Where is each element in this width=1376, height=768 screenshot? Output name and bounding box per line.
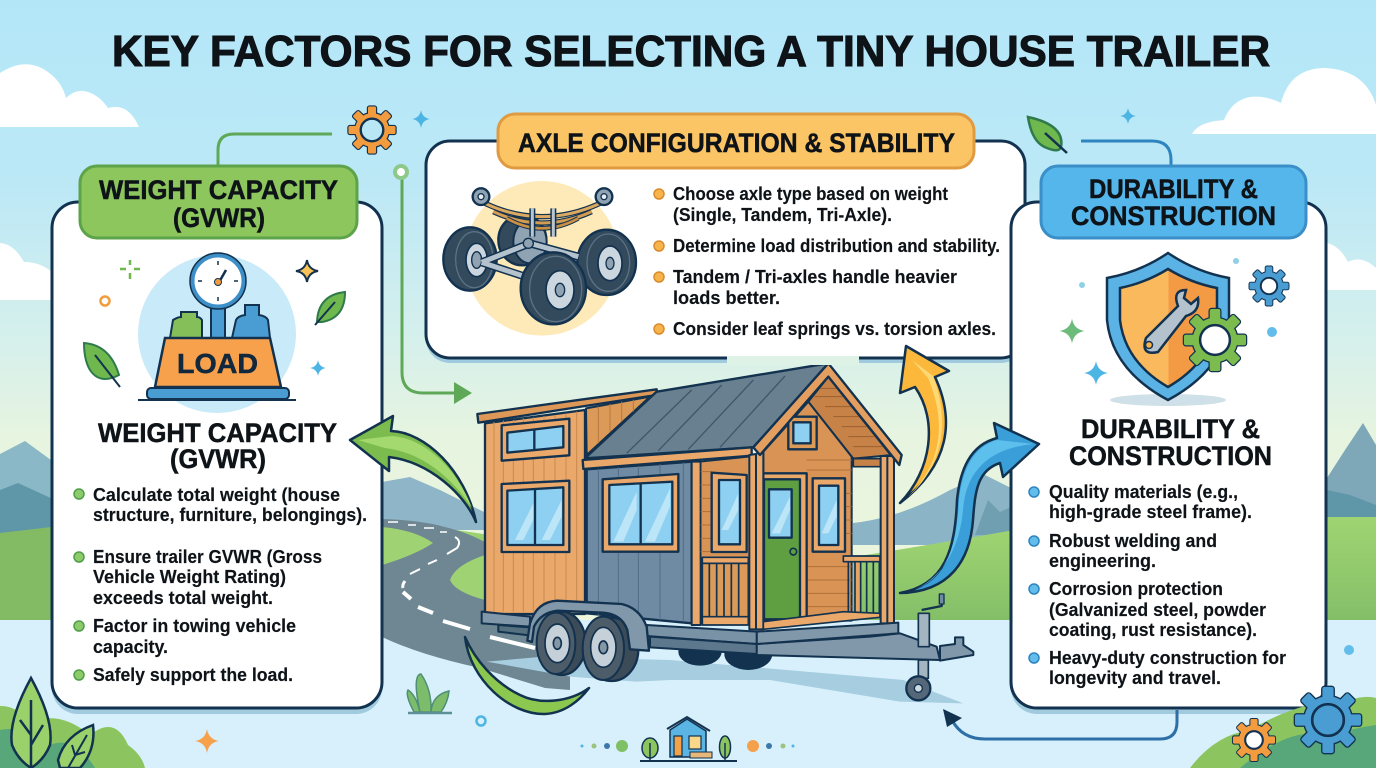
badge: axle: AXLE CONFIGURATION & STABILITY xyxy=(518,128,955,158)
connector: durability xyxy=(1081,141,1171,166)
icon: orange gear xyxy=(348,106,396,154)
bullet: corrosion xyxy=(1029,579,1266,640)
panel: weight capacity xyxy=(52,166,382,714)
icon: orange gear bottom xyxy=(1233,719,1275,761)
badge: weight capacity xyxy=(80,166,357,238)
bullet: calculate total weight: Calculate total weight (house xyxy=(93,485,340,505)
bullet: choose axle: Choose axle type based on weight xyxy=(673,184,948,204)
hills: bottom left inner xyxy=(0,729,95,768)
mountains centre left xyxy=(382,477,490,530)
icon: load scale xyxy=(138,253,296,413)
fender xyxy=(527,601,649,651)
roof xyxy=(585,363,828,458)
bullet: towing vehicle xyxy=(74,616,296,657)
mountains centre right xyxy=(853,475,1015,545)
cloud: top right xyxy=(1192,68,1376,134)
arrow: green to weight panel xyxy=(350,416,476,522)
bullet: robust welding: engineering. xyxy=(1049,551,1156,571)
ground: centre meadow xyxy=(382,519,490,625)
panel shadow xyxy=(426,146,1025,363)
hills: bottom left xyxy=(0,706,145,768)
bullet: calculate total weight xyxy=(74,485,367,525)
bullet: ensure GVWR xyxy=(74,547,322,608)
bullet: load distribution: Determine load distribution and stability. xyxy=(673,236,1000,256)
ground: far right meadow xyxy=(1327,517,1376,620)
road verge left xyxy=(382,527,433,565)
icon: blue ring xyxy=(476,716,486,726)
porch posts xyxy=(749,450,763,629)
blue wall xyxy=(587,462,692,623)
bullet: corrosion: coating, rust resistance). xyxy=(1049,620,1257,640)
panel shadow xyxy=(1011,208,1326,714)
bullet: heavy duty: longevity and travel. xyxy=(1049,668,1221,688)
badge: durability: CONSTRUCTION xyxy=(1071,201,1276,231)
icon: small leaf xyxy=(58,725,93,768)
heading: weight capacity: (GVWR) xyxy=(170,444,266,474)
cloud: top left xyxy=(0,64,139,127)
mountains left front xyxy=(0,483,55,540)
icon: sparkle blue small xyxy=(310,360,326,376)
bullet: ensure GVWR: Ensure trailer GVWR (Gross xyxy=(93,547,322,567)
heading: weight capacity: WEIGHT CAPACITY xyxy=(98,418,337,448)
under spheres xyxy=(678,638,722,666)
footer dots right xyxy=(747,740,794,752)
ground: foreground xyxy=(0,620,1376,768)
heading: durability: DURABILITY & xyxy=(1081,414,1260,444)
bullet: ensure GVWR: exceeds total weight. xyxy=(93,588,273,608)
bullet: towing vehicle: capacity. xyxy=(93,637,168,657)
hills: bottom right inner xyxy=(1240,725,1376,768)
icon: grass xyxy=(407,674,452,713)
connector: weight badge to gear xyxy=(218,134,332,166)
bullet: towing vehicle: Factor in towing vehicle xyxy=(93,616,296,636)
left railing xyxy=(702,563,748,618)
icon: shield xyxy=(1107,253,1229,406)
icon: axle xyxy=(443,181,636,336)
badge: durability: DURABILITY & xyxy=(1089,174,1258,204)
bullet: quality materials: high-grade steel frame). xyxy=(1049,502,1252,522)
tiny house on trailer xyxy=(477,363,973,703)
title: KEY FACTORS FOR SELECTING A TINY HOUSE TRAILER xyxy=(112,27,1270,76)
icon: ring xyxy=(100,296,110,306)
road dashes xyxy=(388,522,535,648)
icon: blue dot right xyxy=(1344,645,1354,655)
bullet: robust welding xyxy=(1029,531,1217,571)
wheels xyxy=(538,612,586,675)
icon: dot xyxy=(1233,258,1239,264)
bullet: tandem xyxy=(654,267,957,308)
deck xyxy=(757,623,898,644)
panel: axle configuration xyxy=(426,114,1025,365)
gable trim xyxy=(753,363,902,465)
bullet: tandem: loads better. xyxy=(673,288,780,308)
door xyxy=(763,473,807,621)
icon: leaf right xyxy=(315,292,345,325)
panel card xyxy=(426,141,1025,358)
icon: green gear xyxy=(1184,309,1246,371)
soffit xyxy=(808,377,891,459)
gable window xyxy=(788,417,817,449)
icon: dot xyxy=(1267,327,1277,337)
badge: durability xyxy=(1041,166,1306,238)
panel card xyxy=(52,202,382,708)
bullet: choose axle: (Single, Tandem, Tri-Axle). xyxy=(673,205,892,225)
bullet: tandem: Tandem / Tri-axles handle heavier xyxy=(673,267,957,287)
bullet: corrosion: (Galvanized steel, powder xyxy=(1049,600,1266,620)
arrow: connector head xyxy=(454,382,472,404)
bullet: robust welding: Robust welding and xyxy=(1049,531,1217,551)
gable wall xyxy=(763,402,852,621)
icon: load scale: LOAD xyxy=(177,348,258,379)
icon: blue gear bottom right xyxy=(1295,687,1361,753)
bullet: quality materials: Quality materials (e.g., xyxy=(1049,482,1238,502)
icon: sparkle blue xyxy=(1084,361,1108,385)
panel shadow xyxy=(52,208,382,714)
icon: sparkle green xyxy=(1060,318,1084,344)
bullet: quality materials xyxy=(1029,482,1252,522)
badge: weight capacity: (GVWR) xyxy=(173,203,265,233)
right door window xyxy=(813,478,845,552)
cloud: mid right xyxy=(1327,243,1376,290)
icon: dot xyxy=(1079,282,1085,288)
arrow: green crescent xyxy=(465,637,589,714)
icon: blue gear xyxy=(1250,266,1288,306)
bullet: calculate total weight: structure, furniture, belongings). xyxy=(93,505,367,525)
panel: durability xyxy=(1011,166,1326,714)
ground: left meadow xyxy=(0,526,60,620)
icon: leaf left xyxy=(84,343,120,387)
arrow: yellow to axle panel xyxy=(900,346,949,503)
heading: weight capacity xyxy=(98,418,337,474)
footer small house emblem xyxy=(640,717,737,761)
bullet: ensure GVWR: Vehicle Weight Rating) xyxy=(93,567,286,587)
arrow: blue to durability panel xyxy=(900,423,1039,593)
bullet: heavy duty xyxy=(1029,648,1286,688)
icon: sparkle top right xyxy=(1120,108,1136,124)
heading: durability: CONSTRUCTION xyxy=(1069,441,1272,471)
panel card xyxy=(1011,202,1326,708)
cloud: mid left xyxy=(0,243,52,300)
bullet: heavy duty: Heavy-duty construction for xyxy=(1049,648,1286,668)
porch floor xyxy=(763,612,880,629)
icon: sparkle yellow xyxy=(296,260,318,282)
bullet: safely support: Safely support the load. xyxy=(93,665,293,685)
mountains right front xyxy=(1327,490,1376,540)
tongue xyxy=(757,633,940,660)
icon: plus sparkle xyxy=(120,260,140,279)
icon: orange sparkle xyxy=(195,729,219,753)
road verge right xyxy=(450,555,485,600)
footer dots left xyxy=(580,740,628,752)
porch wall xyxy=(692,462,701,625)
bullet: leaf springs: Consider leaf springs vs. torsion axles. xyxy=(673,319,996,339)
mountains right xyxy=(1327,423,1376,540)
icon: top leaf right xyxy=(1028,117,1067,153)
ground: right meadow xyxy=(853,529,1020,620)
arrow: blue connector bottom xyxy=(943,709,1177,739)
bullet: choose axle xyxy=(654,184,948,225)
heading: durability xyxy=(1069,414,1272,471)
hills: bottom right xyxy=(1190,697,1376,768)
mountains left xyxy=(0,441,55,540)
bullet: corrosion: Corrosion protection xyxy=(1049,579,1223,599)
icon: sparkle blue xyxy=(412,110,430,128)
badge: axle xyxy=(498,114,974,168)
back wall xyxy=(485,410,585,614)
mountains centre right front xyxy=(975,500,1015,535)
connector: green to axle panel xyxy=(402,178,455,393)
badge: weight capacity: WEIGHT CAPACITY xyxy=(99,175,338,205)
windows back xyxy=(502,419,569,461)
fascia xyxy=(583,447,752,469)
road xyxy=(382,519,570,690)
right railing xyxy=(848,562,879,613)
panel bottom gap xyxy=(727,356,859,365)
icon: tall leaf xyxy=(11,678,51,768)
connector node xyxy=(395,166,407,178)
